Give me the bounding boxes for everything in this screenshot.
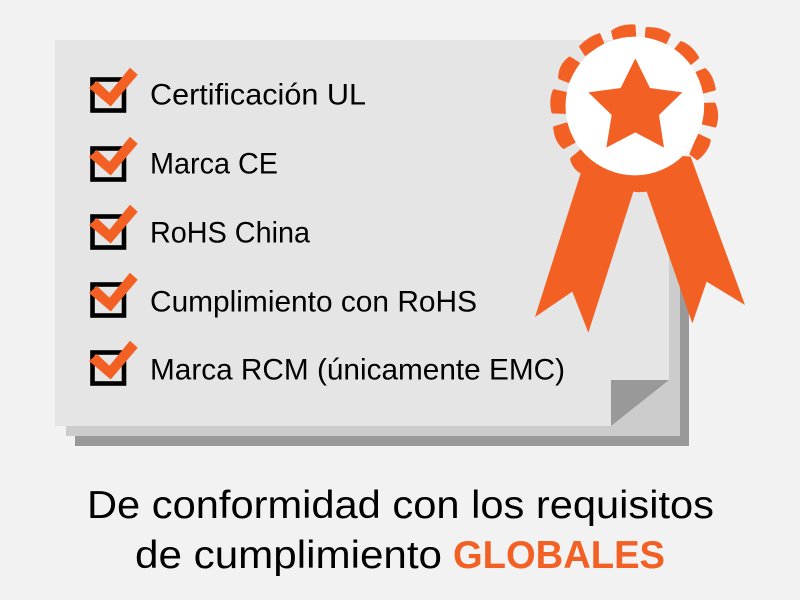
icon: award rosette with ribbons xyxy=(535,26,745,333)
highlighted word: GLOBALES: GLOBALES xyxy=(453,534,665,577)
title: de cumplimiento xyxy=(135,534,442,577)
item: RoHS China: RoHS China xyxy=(150,216,310,250)
title xyxy=(87,484,714,577)
item: Marca CE xyxy=(89,137,278,180)
item: Certificación UL xyxy=(89,68,366,112)
item: Marca RCM xyxy=(89,341,565,386)
item: RoHS China xyxy=(89,205,310,250)
item: Marca RCM: Marca RCM (únicamente EMC) xyxy=(150,354,565,386)
title: De conformidad con los requisitos xyxy=(87,484,714,527)
star xyxy=(588,58,682,148)
rosette white disc xyxy=(565,37,704,175)
item: Cumplimiento con RoHS xyxy=(89,273,477,318)
item: Certificación UL: Certificación UL xyxy=(150,78,366,112)
rosette scallops xyxy=(551,26,717,159)
ribbon tails xyxy=(535,148,745,333)
folded page corner xyxy=(611,380,669,426)
checklist xyxy=(89,68,565,386)
panel: stacked certificate sheets xyxy=(55,40,689,446)
item: Cumplimiento con RoHS: Cumplimiento con RoHS xyxy=(150,286,477,318)
item: Marca CE: Marca CE xyxy=(150,148,278,180)
